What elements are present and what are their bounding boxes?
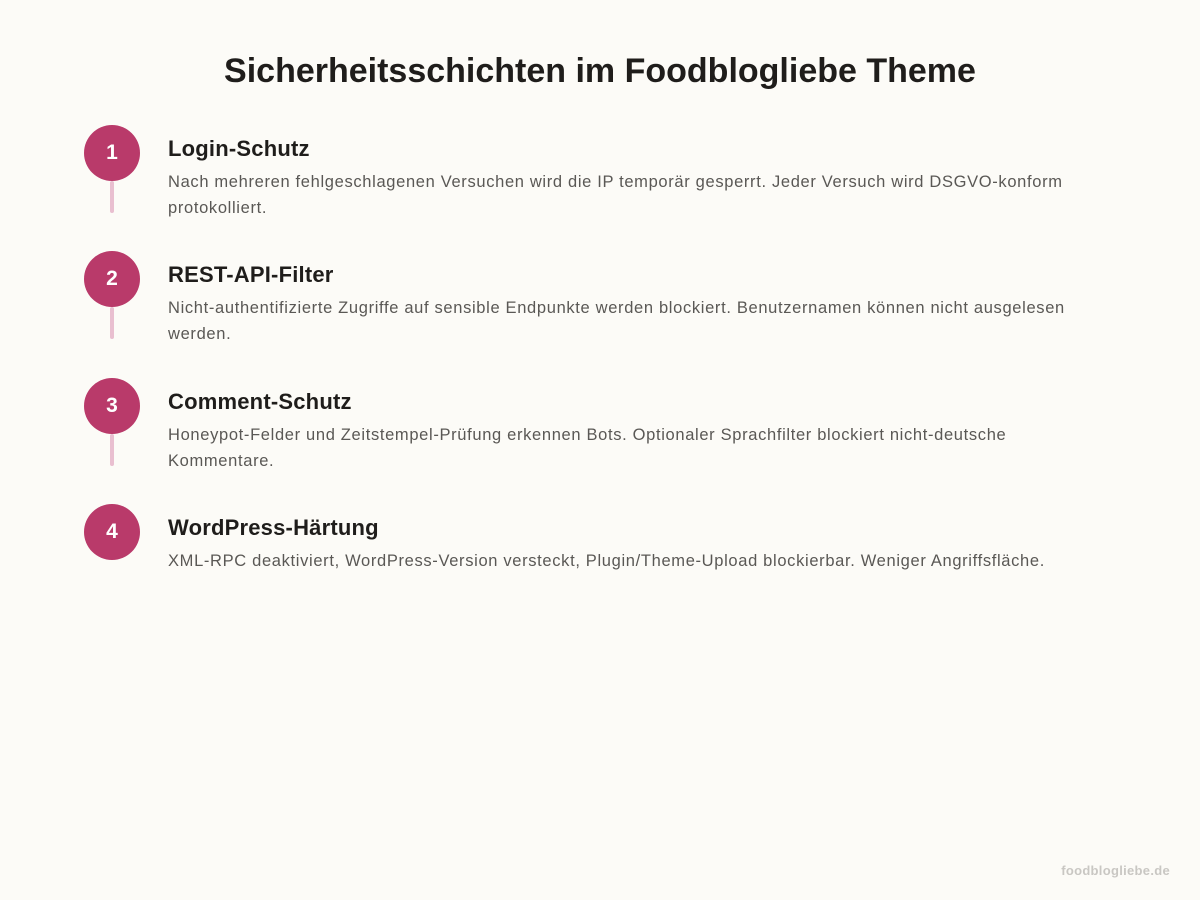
text: Comment-Schutz description: Kommentare.: [168, 452, 274, 470]
icon: number circle 2: [84, 251, 140, 307]
text: WordPress-Härtung description: XML-RPC deaktiviert, WordPress-Version versteckt, Plugin/Theme-Upload blockierbar. Weniger Angriffsfläche.: [168, 552, 1045, 570]
step 2: REST-API-Filter: [84, 251, 1065, 343]
icon: number circle 4: [84, 504, 140, 560]
step 3: Comment-Schutz: [84, 378, 1006, 470]
footer: source: foodblogliebe.de: [1061, 863, 1170, 878]
text: Login-Schutz description: protokolliert.: [168, 199, 267, 217]
icon: number circle 1: [84, 125, 140, 181]
text: Login-Schutz description: Nach mehreren fehlgeschlagenen Versuchen wird die IP temporär gesperrt. Jeder Versuch wird DSGVO-konform: [168, 173, 1063, 191]
icon: number circle 2: 2: [106, 267, 118, 290]
heading: WordPress-Härtung: WordPress-Härtung: [168, 515, 379, 540]
text: REST-API-Filter description: [168, 299, 1065, 343]
text: Comment-Schutz description: [168, 426, 1006, 470]
icon: number circle 3: 3: [106, 394, 118, 417]
step 1: Login-Schutz: [84, 125, 1063, 217]
icon: number circle 1: 1: [106, 141, 118, 164]
text: Login-Schutz description: [168, 173, 1063, 217]
title: Sicherheitsschichten im Foodblogliebe Theme: [224, 52, 976, 90]
icon: number circle 4: 4: [106, 520, 118, 543]
heading: Comment-Schutz: Comment-Schutz: [168, 389, 352, 414]
text: REST-API-Filter description: werden.: [168, 325, 231, 343]
step 4: WordPress-Härtung: [84, 504, 1045, 570]
text: REST-API-Filter description: Nicht-authentifizierte Zugriffe auf sensible Endpunkte werden blockiert. Benutzernamen können nicht ausgelesen: [168, 299, 1065, 317]
heading: REST-API-Filter: REST-API-Filter: [168, 262, 334, 287]
text: Comment-Schutz description: Honeypot-Felder und Zeitstempel-Prüfung erkennen Bots. Optionaler Sprachfilter blockiert nicht-deutsche: [168, 426, 1006, 444]
icon: number circle 3: [84, 378, 140, 434]
heading: Login-Schutz: Login-Schutz: [168, 136, 310, 161]
